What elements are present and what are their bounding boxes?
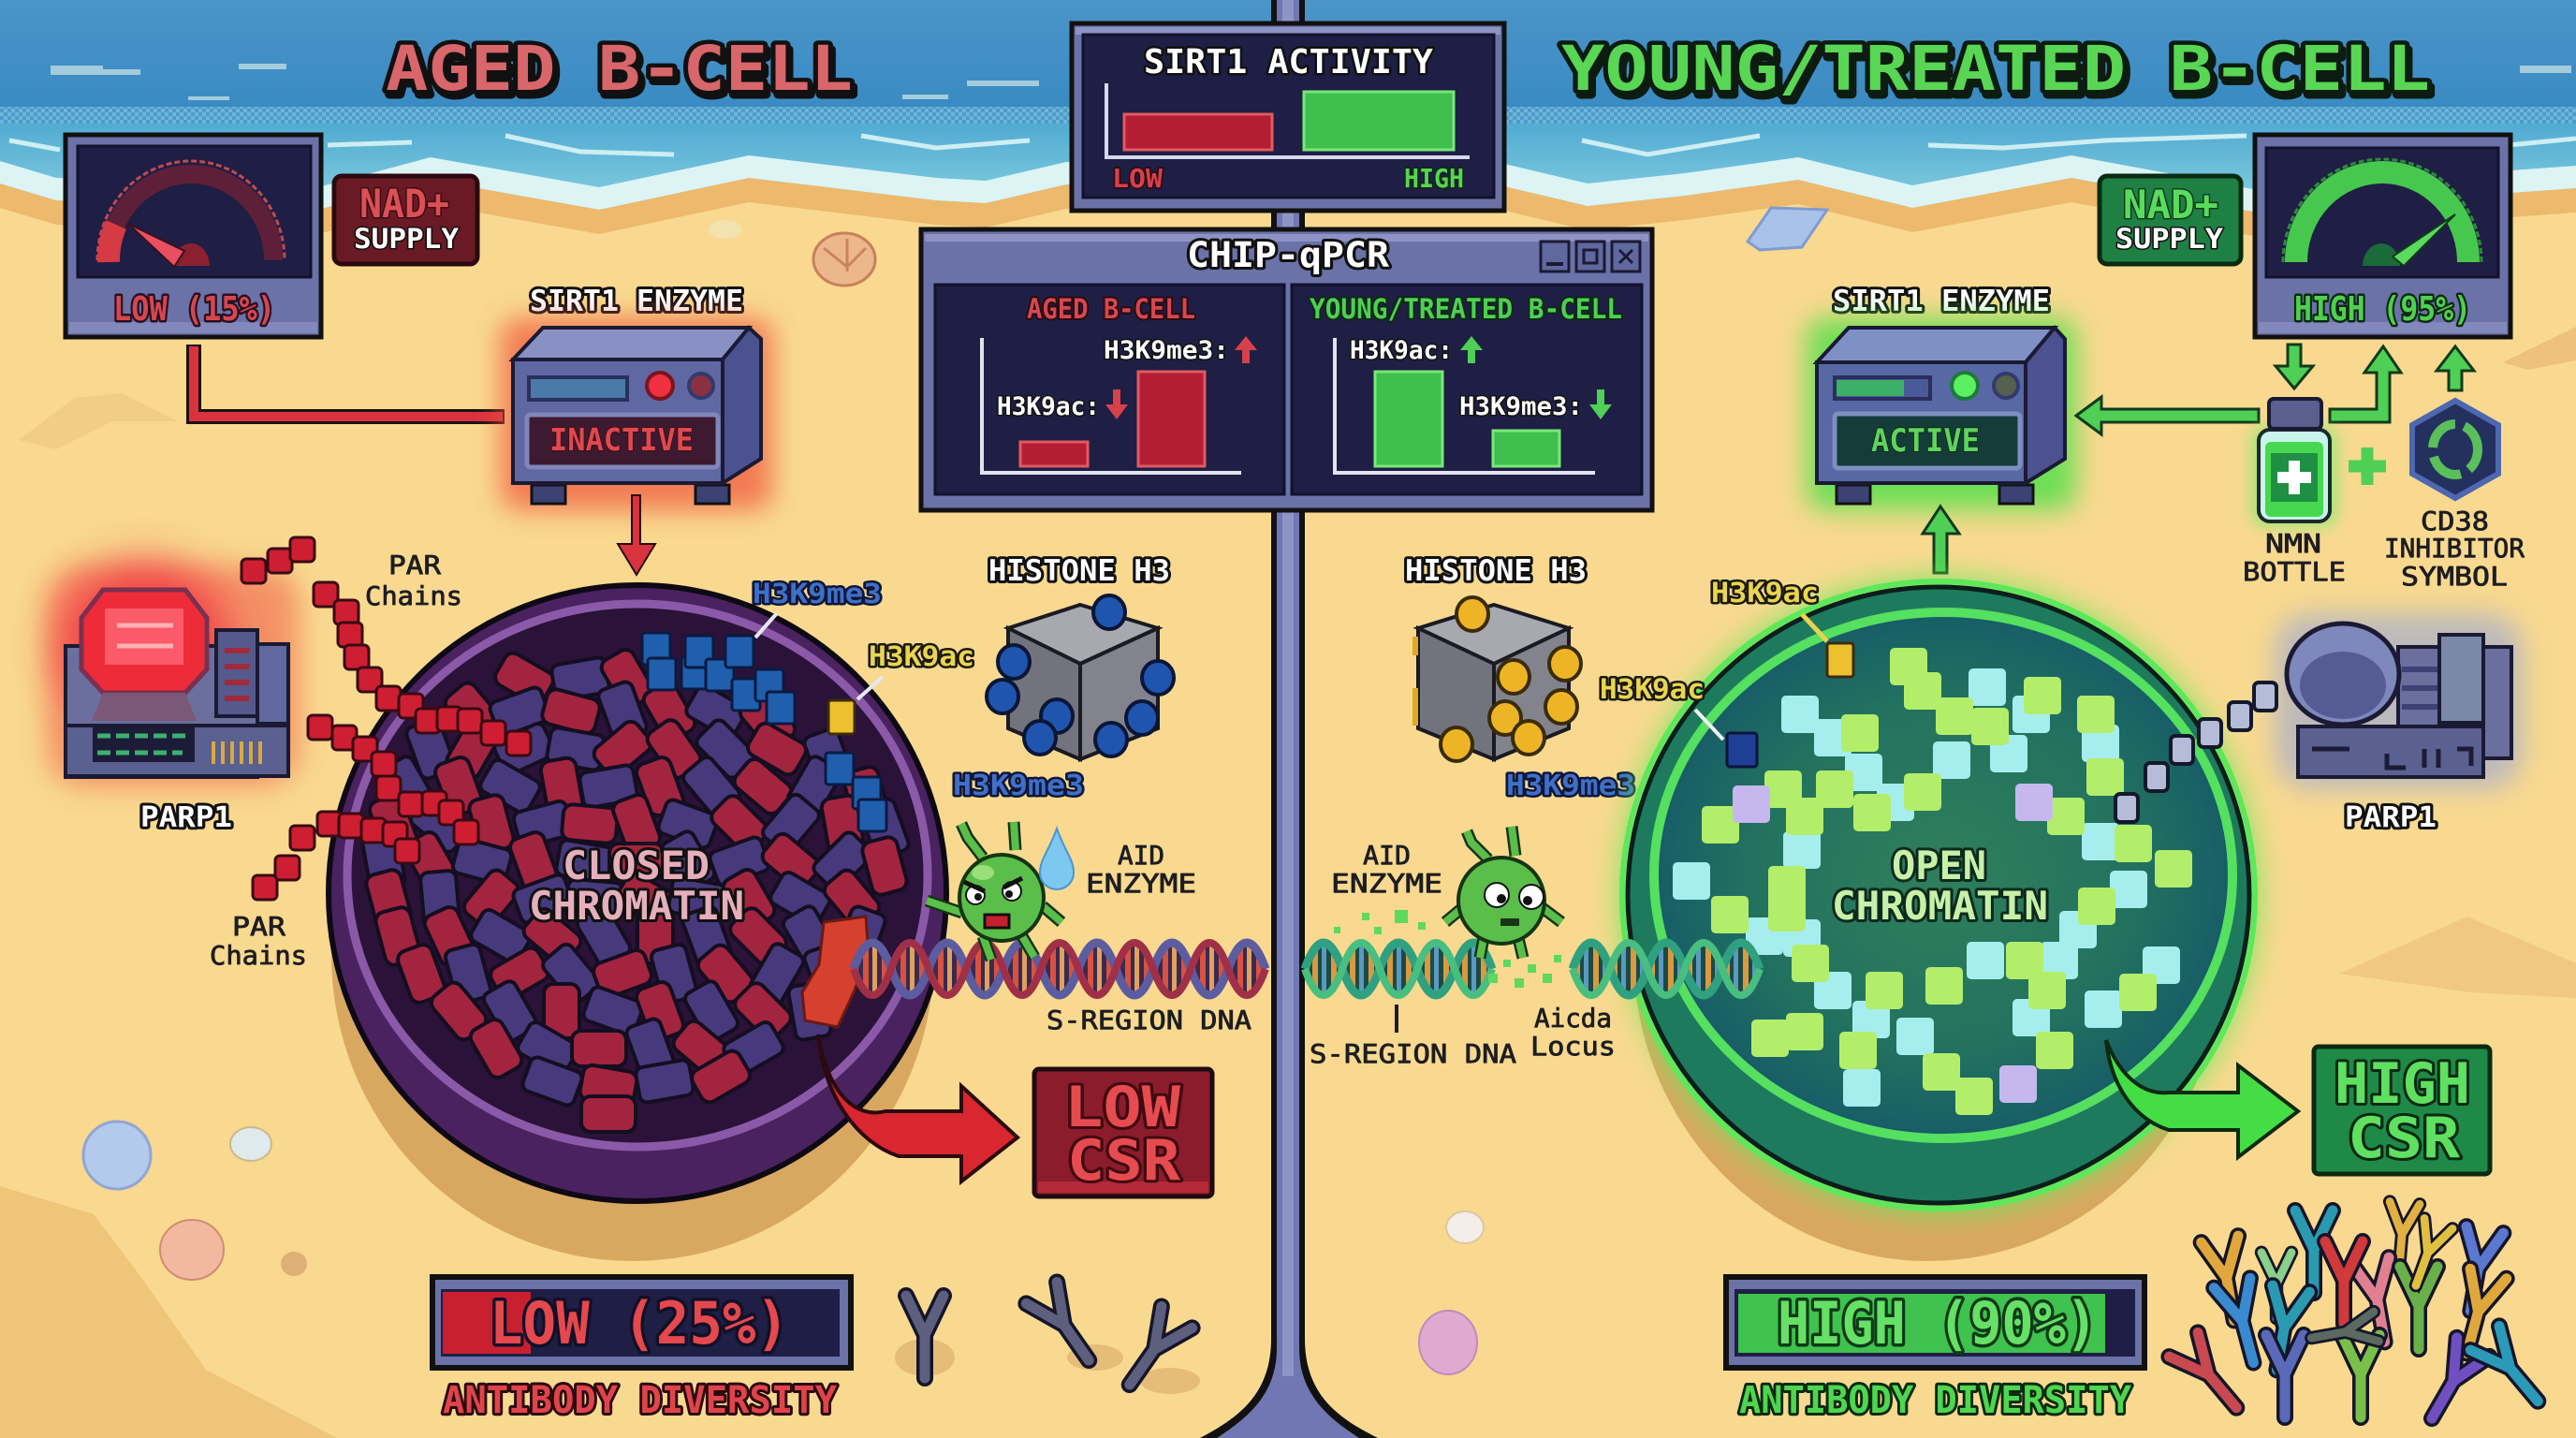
label: young/treated b-cell: YOUNG/TREATED B-CELL <box>1310 293 1622 325</box>
arrow: to low csr <box>818 1034 1017 1181</box>
sub-panel: young chart <box>1292 285 1642 494</box>
connector: gauge to inactive enzyme <box>194 345 505 417</box>
dna: right s-region <box>1305 943 1760 995</box>
leader: h3k9me3 closed <box>755 613 883 699</box>
bar: low activity <box>1124 114 1272 150</box>
label: open chromatin <box>1832 843 2048 929</box>
label: aid enzyme right: ENZYME <box>1331 868 1442 899</box>
bar: aged h3k9ac <box>1020 442 1088 466</box>
arrow: bottle to active enzyme <box>2076 397 2259 434</box>
label: parp1 young: PARP1 <box>2345 801 2437 834</box>
label: par chains lower <box>210 911 307 971</box>
arrow: down green <box>1589 389 1612 419</box>
label: parp1 aged: PARP1 <box>140 801 232 834</box>
progress bar: high antibody diversity: HIGH (90%) <box>1778 1289 2098 1357</box>
status: inactive: INACTIVE <box>549 421 694 458</box>
value label: young h3k9ac: H3K9ac: <box>1350 336 1453 365</box>
arrow: bottle up to gauge <box>2330 346 2401 422</box>
callout: low csr: LOW <box>1064 1075 1181 1140</box>
label: cd38 inhibitor symbol: INHIBITOR <box>2384 533 2525 564</box>
damage patch <box>802 917 869 1027</box>
arrow: inactive enzyme to closed chromatin <box>618 495 655 575</box>
dna: left s-region <box>854 943 1266 995</box>
par chains: aged parp1 <box>242 537 531 900</box>
label: nmn bottle <box>2243 528 2346 587</box>
center divider pole <box>1200 0 1378 1438</box>
value label: young h3k9me3: H3K9me3: <box>1459 392 1583 421</box>
leader: me3 open <box>1695 710 1723 740</box>
label: h3k9me3 aged histone: H3K9me3 <box>953 770 1084 802</box>
label: aid enzyme left: AID <box>1118 840 1164 871</box>
icons: few antibodies <box>895 1282 1200 1396</box>
label: open chromatin: OPEN <box>1892 843 1986 888</box>
label: antibody diversity right: ANTIBODY DIVERSITY <box>1739 1379 2131 1422</box>
label: par chains lower: Chains <box>210 940 307 971</box>
icon: nmn bottle <box>2251 399 2337 527</box>
arrow: up green <box>1460 336 1483 363</box>
label: cd38 inhibitor symbol: SYMBOL <box>2401 561 2508 592</box>
beads: short par chain <box>2115 682 2276 822</box>
arrow: gauge to bottle <box>2276 345 2313 389</box>
arrow: open chromatin to active enzyme <box>1923 506 1959 573</box>
label: aged b-cell: AGED B-CELL <box>1027 293 1195 325</box>
callout: high csr: CSR <box>2348 1106 2461 1171</box>
label box: aged nad+ supply <box>334 176 477 264</box>
histone h3 cube young <box>1405 554 1587 761</box>
label: h3k9ac open lower: H3K9ac <box>1600 673 1705 705</box>
label: open chromatin: CHROMATIN <box>1832 883 2048 929</box>
label: aid enzyme left <box>1086 840 1196 899</box>
progress bar: low antibody diversity <box>432 1277 851 1368</box>
machine: sirt1 active <box>1807 318 2076 510</box>
device: parp1 inactive <box>2275 613 2523 789</box>
arrow: inhibitor to gauge <box>2437 346 2474 390</box>
bar: young h3k9ac <box>1375 372 1442 466</box>
label: cd38 inhibitor symbol: CD38 <box>2421 506 2489 536</box>
label: par chains upper: Chains <box>365 580 462 611</box>
label: closed chromatin <box>529 843 744 929</box>
panel: young nad gauge <box>2255 135 2510 337</box>
panel: chip-qpcr window <box>921 229 1652 510</box>
label: h3k9ac open upper: H3K9ac <box>1711 577 1819 609</box>
label: par chains upper: PAR <box>388 550 441 580</box>
heading: chip-qpcr: CHIP-qPCR <box>1187 235 1390 275</box>
gauge value: HIGH (95%) <box>2294 290 2471 329</box>
gauge value: LOW (15%) <box>113 290 275 329</box>
label box: aged nad+ supply: NAD+ <box>359 181 449 227</box>
h3k9me3 marks on chromatin <box>642 633 886 831</box>
status: active: ACTIVE <box>1871 422 1980 460</box>
callout: low csr <box>1034 1069 1212 1196</box>
sub-panel: aged chart <box>935 285 1284 494</box>
label: par chains upper <box>365 550 462 611</box>
label: cd38 inhibitor symbol <box>2384 506 2525 592</box>
axis label low: LOW <box>1112 163 1163 194</box>
panel: aged nad gauge <box>66 135 321 337</box>
arrow: down red <box>1105 389 1128 419</box>
label box: young nad+ supply: SUPPLY <box>2115 223 2224 255</box>
label: histone young: HISTONE H3 <box>1405 554 1587 588</box>
label: closed chromatin: CHROMATIN <box>529 883 744 929</box>
bar: young h3k9me3 <box>1493 431 1559 466</box>
label: h3k9ac closed: H3K9ac <box>869 640 974 672</box>
histone h3 cube aged <box>987 554 1174 759</box>
value label: aged h3k9me3: H3K9me3: <box>1104 336 1229 365</box>
label: h3k9me3 young histone: H3K9me3 <box>1506 770 1635 802</box>
callout: low csr: CSR <box>1067 1128 1181 1194</box>
label box: young nad+ supply <box>2100 176 2241 264</box>
label: aicda locus: Locus <box>1530 1031 1616 1062</box>
bar: high activity <box>1304 92 1454 150</box>
dna break sparkles <box>1334 910 1561 988</box>
label: young sirt1 enzyme: SIRT1 ENZYME <box>1833 285 2050 318</box>
callout: high csr <box>2314 1047 2490 1174</box>
closed chromatin nucleus <box>329 585 946 1261</box>
leader: s-region right <box>1395 1005 1398 1033</box>
label box: young nad+ supply: NAD+ <box>2123 182 2218 227</box>
window buttons <box>1541 242 1640 271</box>
icon: plus <box>2349 448 2386 485</box>
label: s-region dna right: S-REGION DNA <box>1310 1038 1516 1069</box>
progress bar: high antibody diversity <box>1726 1277 2144 1368</box>
label: aged sirt1 enzyme: SIRT1 ENZYME <box>530 285 743 318</box>
label: par chains lower: PAR <box>232 911 285 942</box>
value label: aged h3k9ac: H3K9ac: <box>997 392 1100 421</box>
heading: sirt1 activity: SIRT1 ACTIVITY <box>1144 43 1433 81</box>
callout: high csr: HIGH <box>2334 1051 2470 1117</box>
axis label high: HIGH <box>1404 163 1464 194</box>
arrow: to high csr <box>2106 1040 2298 1157</box>
label: aid enzyme right: AID <box>1363 840 1411 871</box>
label: histone aged: HISTONE H3 <box>988 554 1170 588</box>
title: young/treated b-cell: YOUNG/TREATED B-CELL <box>1561 33 2430 105</box>
label: aicda locus <box>1530 1003 1616 1062</box>
label: nmn bottle: NMN <box>2265 528 2321 559</box>
label: aid enzyme right <box>1331 840 1442 899</box>
label: h3k9me3 closed: H3K9me3 <box>753 578 882 609</box>
leaders: open chromatin marks <box>1802 614 1827 641</box>
label: aicda locus: Aicda <box>1534 1003 1612 1034</box>
machine: sirt1 inactive <box>501 318 772 510</box>
device: parp1 active <box>47 564 300 786</box>
chromatin tiles <box>361 646 911 1132</box>
label: aid enzyme left: ENZYME <box>1086 868 1196 899</box>
label: antibody diversity left: ANTIBODY DIVERSITY <box>443 1379 837 1422</box>
open chromatin nucleus <box>1617 575 2261 1261</box>
shells <box>83 208 1827 1374</box>
icons: antibody cluster <box>2169 1202 2553 1428</box>
label: closed chromatin: CLOSED <box>563 843 710 888</box>
label: s-region dna left: S-REGION DNA <box>1046 1005 1251 1035</box>
label: nmn bottle: BOTTLE <box>2243 556 2346 587</box>
h3k9ac mark on open chromatin <box>1827 643 1853 677</box>
arrow: up red <box>1235 336 1257 363</box>
h3k9ac mark on chromatin <box>828 700 855 734</box>
bar: aged h3k9me3 <box>1138 372 1205 466</box>
icon: cd38 inhibitor hexagon <box>2412 401 2498 498</box>
title: aged b-cell: AGED B-CELL <box>386 33 853 105</box>
chromatin squares <box>1673 648 2192 1115</box>
panel: sirt1 activity <box>1072 23 1504 211</box>
character: aid enzyme neutral <box>1445 827 1561 958</box>
h3k9me3 mark on open chromatin <box>1727 733 1757 767</box>
label box: aged nad+ supply: SUPPLY <box>354 223 460 255</box>
progress bar: low antibody diversity: LOW (25%) <box>490 1289 789 1357</box>
character: aid enzyme angry <box>927 822 1074 960</box>
connector inner <box>194 346 503 417</box>
